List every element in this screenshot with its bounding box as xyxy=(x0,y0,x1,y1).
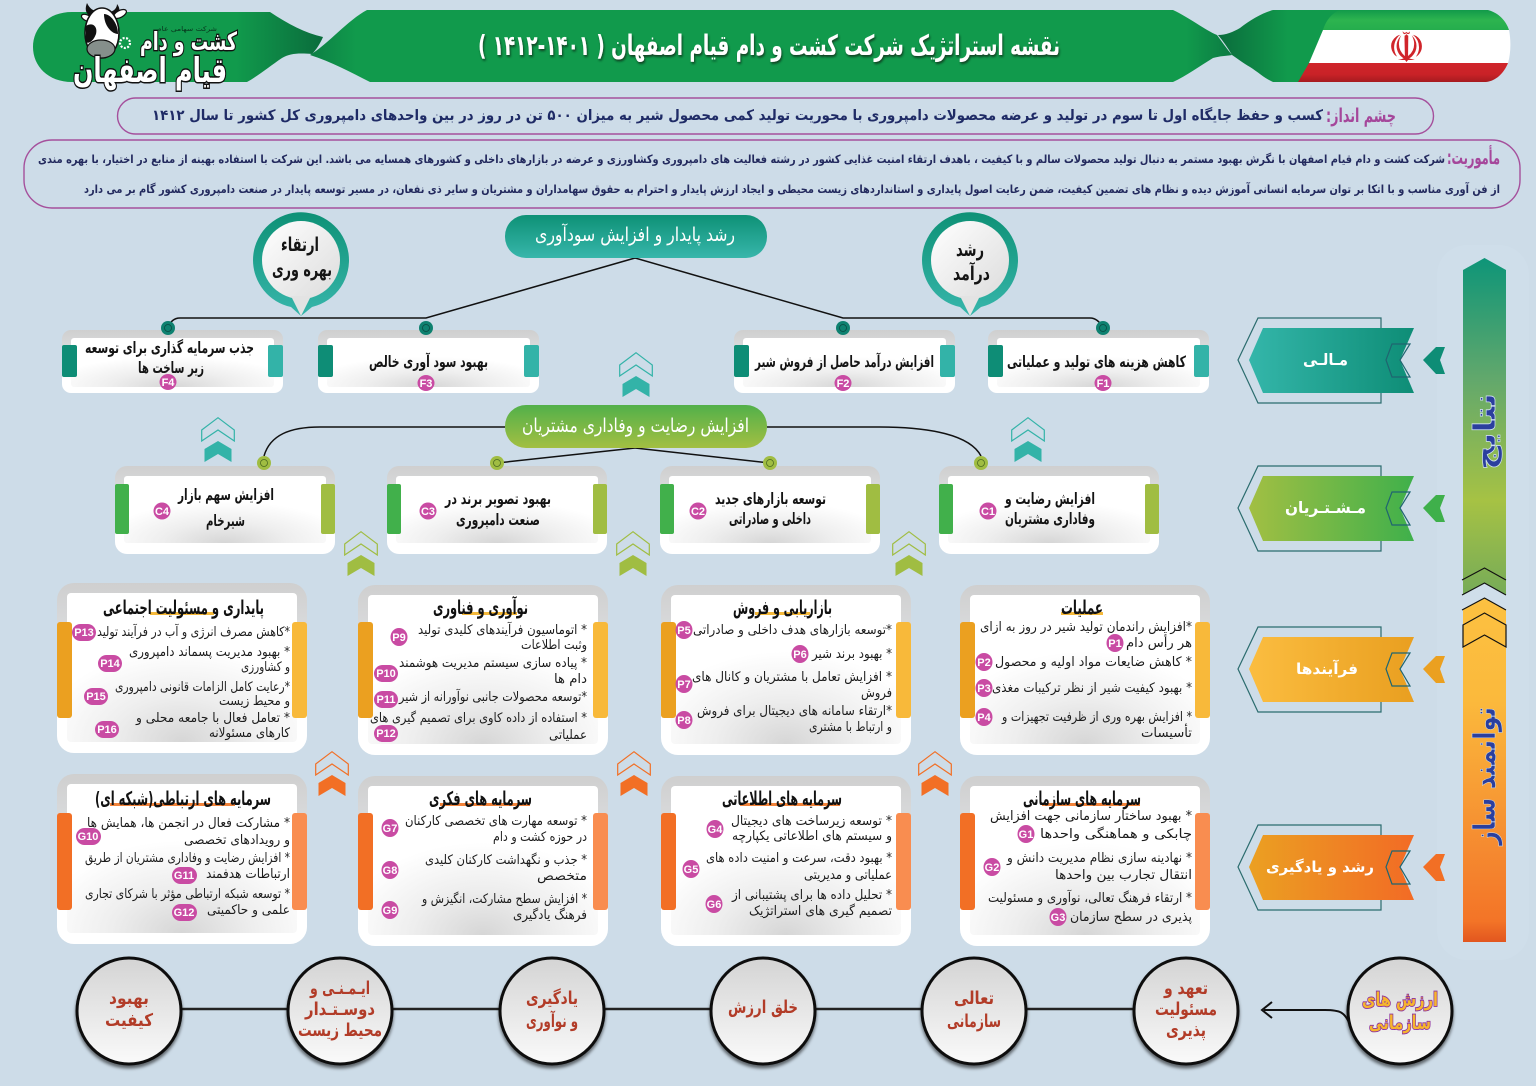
panel: relational capital: G11 xyxy=(174,870,194,882)
panel: intellectual capital: G7 xyxy=(383,823,397,835)
logo text xyxy=(73,25,237,91)
panel: marketing and sales: P5 xyxy=(677,625,691,637)
panel: organizational capital: سرمایه های سازمانی xyxy=(1023,788,1141,810)
panel: marketing and sales: * بهبود برند شیر xyxy=(811,647,892,662)
panel: operations: تأسیسات xyxy=(1141,723,1192,741)
panel: F1 xyxy=(988,330,1209,393)
panel: information capital: عملیاتی و مدیریتی xyxy=(804,868,892,883)
panel: marketing and sales: P6 xyxy=(793,649,807,661)
category arrow: financial: مـالـی xyxy=(1303,350,1348,369)
logo text: شرکت سهامی عام xyxy=(157,25,217,33)
panel: F4: زیر ساخت ها xyxy=(138,359,204,377)
panel: sustainability and social responsibility: P14 xyxy=(100,658,121,670)
logo: Kesht va Dam Qiam Isfahan xyxy=(73,3,237,91)
heading pill: customer satisfaction: افزایش رضایت و وفاداری مشتریان xyxy=(522,415,749,437)
panel: C1: C1 xyxy=(981,506,995,518)
panel: marketing and sales: بازاریابی و فروش xyxy=(733,597,832,619)
panel: intellectual capital: فرهنگ یادگیری xyxy=(513,907,587,923)
panel: operations: P4 xyxy=(977,712,992,724)
panel: intellectual capital: * توسعه مهارت های تخصصی کارکنان xyxy=(405,814,587,829)
panel: sustainability and social responsibility: کارهای مسئولانه xyxy=(209,726,291,741)
panel: marketing and sales: P8 xyxy=(677,715,691,727)
panel: F2: افزایش درآمد حاصل از فروش شیر xyxy=(754,352,934,371)
connector dots: customers xyxy=(257,456,988,470)
panel: C4: افزایش سهم بازار xyxy=(177,486,274,504)
panel: intellectual capital: سرمایه های فکری xyxy=(429,788,532,810)
panel: marketing and sales xyxy=(661,585,911,755)
panel: operations: عملیات xyxy=(1061,597,1103,619)
panel: operations: * کاهش ضایعات مواد اولیه و محصول xyxy=(995,655,1192,670)
speech bubble: revenue growth: رشد xyxy=(956,239,984,261)
arrows: upward chevrons teal xyxy=(202,353,1044,462)
panel: sustainability and social responsibility: *کاهش مصرف انرژی و آب در فرآیند تولید xyxy=(97,623,290,640)
panel: innovation and technology: عملیاتی xyxy=(549,728,587,743)
panel: organizational capital xyxy=(960,776,1210,946)
value circle: excellence: تعالی xyxy=(954,989,994,1009)
arrows: upward chevrons green xyxy=(345,532,925,576)
logo text: کشت و دام xyxy=(140,27,237,57)
title: نقشه استراتژیک شرکت کشت و دام قیام اصفهان ( ۱۴۰۱-۱۴۱۲ ) xyxy=(478,29,1060,62)
bar seam chevrons xyxy=(1462,568,1506,647)
panel: F4: F4 xyxy=(162,377,175,389)
heading pill: sustainable growth xyxy=(505,215,767,258)
value circle: safety and environment: دوسـتـدار xyxy=(304,1000,375,1020)
vertical bar: results xyxy=(1463,258,1506,595)
vision statement: چشم انداز: xyxy=(1326,105,1396,127)
panel: organizational capital: چابکی و هماهنگی واحدها xyxy=(1040,826,1192,842)
panel: relational capital: سرمایه های ارتباطی(شبکه ای) xyxy=(95,788,271,810)
panel: innovation and technology: *توسعه محصولات جانبی نوآورانه از شیر xyxy=(398,688,587,705)
panel: innovation and technology: * اتوماسیون فرآیندهای کلیدی تولید xyxy=(418,621,587,638)
panel: sustainability and social responsibility: و محیط زیست xyxy=(219,694,290,709)
panel: sustainability and social responsibility: P13 xyxy=(74,627,94,639)
panel: innovation and technology xyxy=(358,585,608,755)
panel: sustainability and social responsibility xyxy=(57,583,307,753)
speech bubble: revenue growth: درآمد xyxy=(953,261,990,285)
value circle: excellence xyxy=(922,958,1026,1064)
connector lines: financial xyxy=(168,258,1103,328)
panel: marketing and sales: * افزایش تعامل با مشتریان و کانال های xyxy=(692,670,892,685)
category arrow: growth and learning: رشد و یادگیری xyxy=(1266,858,1374,876)
panel: C3: بهبود تصویر برند در xyxy=(444,490,551,508)
panel: operations: *افزایش راندمان تولید شیر در روز به ازای xyxy=(980,620,1192,635)
value circle: learning: و نوآوری xyxy=(526,1009,578,1032)
vertical bar: capability building: توانمند ساز xyxy=(1468,707,1503,847)
value circle: quality improvement: بهبود xyxy=(109,989,149,1009)
panel: intellectual capital: متخصص xyxy=(537,869,587,884)
arrow: values to commitment xyxy=(1262,1002,1350,1025)
heading pill: customer satisfaction xyxy=(505,405,767,448)
panel: intellectual capital: G9 xyxy=(383,905,397,917)
panel: innovation and technology: نوآوری و فناوری xyxy=(433,595,528,619)
logo text: قیام اصفهان xyxy=(73,51,227,91)
connector dots: financial xyxy=(161,321,1110,335)
panel: C1: وفاداری مشتریان xyxy=(1005,510,1095,528)
panel: relational capital: * توسعه شبکه ارتباطی مؤثر با شرکای تجاری xyxy=(85,887,290,902)
panel: operations: P3 xyxy=(977,683,991,695)
category arrow: customers xyxy=(1238,466,1445,551)
panel: organizational capital: G3 xyxy=(1051,912,1065,924)
header ribbon: title band xyxy=(310,10,1232,82)
value circle: value creation xyxy=(711,958,815,1064)
panel: C3 xyxy=(387,466,607,554)
panel: marketing and sales: *ارتقاء سامانه های دیجیتال برای فروش xyxy=(697,704,892,719)
value circle: commitment: تعهد و xyxy=(1163,979,1208,999)
panel: information capital: G4 xyxy=(708,824,723,836)
panel: F1: F1 xyxy=(1097,378,1109,390)
speech bubble: revenue growth xyxy=(922,212,1018,316)
vision statement: کسب و حفظ جایگاه اول تا سوم در تولید و عرضه محصولات دامپروری با محوریت تولید کمی محصول شیر به میزان ۵۰۰ تن در روز در بین واحدهای دامپروری کل کشور تا سال ۱۴۱۲ xyxy=(152,106,1324,124)
panel: information capital: و سیستم های اطلاعاتی یکپارچه xyxy=(732,829,892,844)
panel: C2: توسعه بازارهای جدید xyxy=(715,490,826,508)
panel: information capital: سرمایه های اطلاعاتی xyxy=(722,788,842,810)
panel: F4 xyxy=(62,330,283,393)
panel: marketing and sales: P7 xyxy=(677,679,691,691)
vertical bar: results: نتایج xyxy=(1468,393,1503,470)
panel: marketing and sales: و ارتباط با مشتری xyxy=(809,720,892,735)
panel: C3: C3 xyxy=(421,506,435,518)
value circle: quality improvement: کیفیت xyxy=(105,1011,154,1031)
panel: information capital: G5 xyxy=(684,864,698,876)
value circle: commitment xyxy=(1134,958,1238,1064)
value circle: organizational values: ارزش های xyxy=(1362,989,1438,1011)
speech bubble: productivity: بهره وری xyxy=(272,259,332,281)
panel: relational capital: * مشارکت فعال در انجمن ها، همایش ها xyxy=(87,816,290,831)
panel: operations: * افزایش بهره وری از ظرفیت تجهیزات و xyxy=(1001,710,1192,725)
panel: operations: * بهبود کیفیت شیر از نظر ترکیبات مغذی xyxy=(992,681,1192,696)
value circle: commitment: مسئولیت xyxy=(1155,1000,1217,1020)
panel: intellectual capital: * افزایش سطح مشارکت، انگیزش و xyxy=(421,891,587,907)
panel: relational capital: ارتباطات هدفمند xyxy=(206,867,290,882)
panel: operations: P1 xyxy=(1108,638,1122,650)
panel: innovation and technology: وثبت اطلاعات xyxy=(521,638,587,653)
panel: information capital: * بهبود دقت، سرعت و امنیت داده های xyxy=(706,851,892,866)
panel: relational capital: و رویدادهای تخصصی xyxy=(184,833,290,848)
category arrow: customers: مـشـتـریان xyxy=(1285,498,1366,517)
panel: organizational capital: * بهبود ساختار سازمانی جهت افزایش xyxy=(990,809,1192,824)
header ribbon: left logo band xyxy=(33,12,323,82)
panel: innovation and technology: * استفاده از داده کاوی برای تصمیم گیری های xyxy=(370,710,587,726)
icon: flag emblem: ☫ xyxy=(1388,23,1425,72)
panel: relational capital xyxy=(57,774,307,944)
panel: sustainability and social responsibility: * تعامل فعال با جامعه محلی و xyxy=(135,711,290,726)
panel: intellectual capital: * جذب و نگهداشت کارکنان کلیدی xyxy=(425,852,587,868)
panel: F3: F3 xyxy=(420,378,432,390)
mission statement: مأموریت: xyxy=(1447,145,1500,169)
panel: information capital: تصمیم گیری های استراتژیک xyxy=(749,903,892,919)
value circle: safety and environment: ایـمـنـی و xyxy=(309,979,370,999)
panel: organizational capital: * ارتقاء فرهنگ تعالی، نوآوری و مسئولیت xyxy=(988,889,1192,906)
value circle: value creation: خلق ارزش xyxy=(728,998,798,1018)
category arrow: processes xyxy=(1238,627,1445,712)
connector lines: customers xyxy=(264,427,981,463)
arrows: upward chevrons orange xyxy=(316,752,951,796)
value circle: organizational values xyxy=(1348,958,1452,1064)
panel: innovation and technology: P12 xyxy=(376,728,396,740)
panel: organizational capital: G2 xyxy=(985,862,999,874)
category arrow: growth and learning xyxy=(1238,825,1445,910)
panel: C4 xyxy=(115,466,335,554)
value circle: organizational values: سازمانی xyxy=(1369,1012,1431,1034)
panel: intellectual capital xyxy=(358,776,608,946)
panel: operations: P2 xyxy=(977,657,991,669)
panel: information capital xyxy=(661,776,911,946)
panel: sustainability and social responsibility: *رعایت کامل الزامات قانونی دامپروری xyxy=(115,680,290,695)
panel: information capital: * تحلیل داده ها برای پشتیبانی از xyxy=(731,888,892,903)
panel: sustainability and social responsibility: * بهبود مدیریت پسماند دامپروری xyxy=(129,645,290,660)
value circle: safety and environment xyxy=(288,958,392,1064)
panel: information capital: G6 xyxy=(707,899,721,911)
panel: intellectual capital: G8 xyxy=(383,865,397,877)
value circle: learning xyxy=(500,958,604,1064)
panel: relational capital: G12 xyxy=(174,907,194,919)
panel: F2 xyxy=(734,330,955,393)
category arrow: financial xyxy=(1238,318,1445,403)
panel: intellectual capital: در حوزه کشت و دام xyxy=(493,830,587,845)
panel: organizational capital: G1 xyxy=(1019,829,1033,841)
panel: sustainability and social responsibility: P15 xyxy=(86,691,106,703)
panel: F2: F2 xyxy=(837,378,849,390)
panel: C3: صنعت دامپروری xyxy=(456,511,540,530)
panel: C2: C2 xyxy=(691,506,705,518)
panel: C2: داخلی و صادراتی xyxy=(729,510,811,528)
panel: marketing and sales: فروش xyxy=(861,686,892,701)
value circle: learning: یادگیری xyxy=(526,988,578,1009)
icon: flower xyxy=(120,38,130,48)
panel: organizational capital: * نهادینه سازی نظام مدیریت دانش و xyxy=(1006,851,1192,866)
icon: cow head xyxy=(80,3,130,58)
panel: organizational capital: انتقال تجارب بین واحدها xyxy=(1055,868,1192,883)
panel: F3: بهبود سود آوری خالص xyxy=(369,352,488,371)
heading pill: sustainable growth: رشد پایدار و افزایش سودآوری xyxy=(535,222,735,246)
panel: F3 xyxy=(318,330,539,393)
panel: sustainability and social responsibility: پایداری و مسئولیت اجتماعی xyxy=(103,597,264,619)
iran flag banner xyxy=(1218,10,1510,82)
panel: innovation and technology: P11 xyxy=(377,694,395,706)
panel: relational capital: * افزایش رضایت و وفاداری مشتریان از طریق xyxy=(85,851,290,866)
panel: operations xyxy=(960,585,1210,755)
panel: sustainability and social responsibility: و کشاورزی xyxy=(241,660,290,675)
panel: F1: کاهش هزینه های تولید و عملیاتی xyxy=(1007,353,1187,371)
panel: relational capital: علمی و حاکمیتی xyxy=(207,903,290,918)
panel: F4: جذب سرمایه گذاری برای توسعه xyxy=(85,338,254,357)
panel: relational capital: G10 xyxy=(78,831,98,843)
category arrow: processes: فرآیندها xyxy=(1296,660,1358,678)
panel: operations: هر رأس دام xyxy=(1126,634,1192,651)
connector line: values row xyxy=(129,1008,1134,1010)
panel: innovation and technology: * پیاده سازی سیستم مدیریت هوشمند xyxy=(399,656,587,671)
vision statement xyxy=(118,98,1434,134)
panel: information capital: * توسعه زیرساخت های دیجیتال xyxy=(731,814,892,829)
panel: innovation and technology: P9 xyxy=(392,632,406,644)
speech bubble: productivity: ارتقاء xyxy=(281,234,319,256)
soft halo behind vertical bar xyxy=(1437,245,1529,960)
mission statement xyxy=(24,140,1520,208)
panel: organizational capital: پذیری در سطح سازمان xyxy=(1070,910,1192,925)
speech bubble: productivity xyxy=(253,212,349,316)
value circle: safety and environment: محیط زیست xyxy=(298,1021,382,1041)
panel: sustainability and social responsibility: P16 xyxy=(97,724,117,736)
value circle: quality improvement xyxy=(77,958,181,1064)
panel: innovation and technology: P10 xyxy=(376,668,396,680)
panel: C1: افزایش رضایت و xyxy=(1004,490,1095,508)
panel: C2 xyxy=(660,466,880,554)
vertical bar: capability building xyxy=(1463,598,1506,942)
panel: C4: شیرخام xyxy=(206,512,245,530)
panel: C4: C4 xyxy=(155,506,170,518)
value circle: excellence: سازمانی xyxy=(947,1012,1001,1032)
panel: C1 xyxy=(939,466,1159,554)
value circle: commitment: پذیری xyxy=(1166,1021,1206,1041)
panel: innovation and technology: دام ها xyxy=(554,672,587,687)
panel: marketing and sales: *توسعه بازارهای هدف داخلی و صادراتی xyxy=(693,623,892,638)
